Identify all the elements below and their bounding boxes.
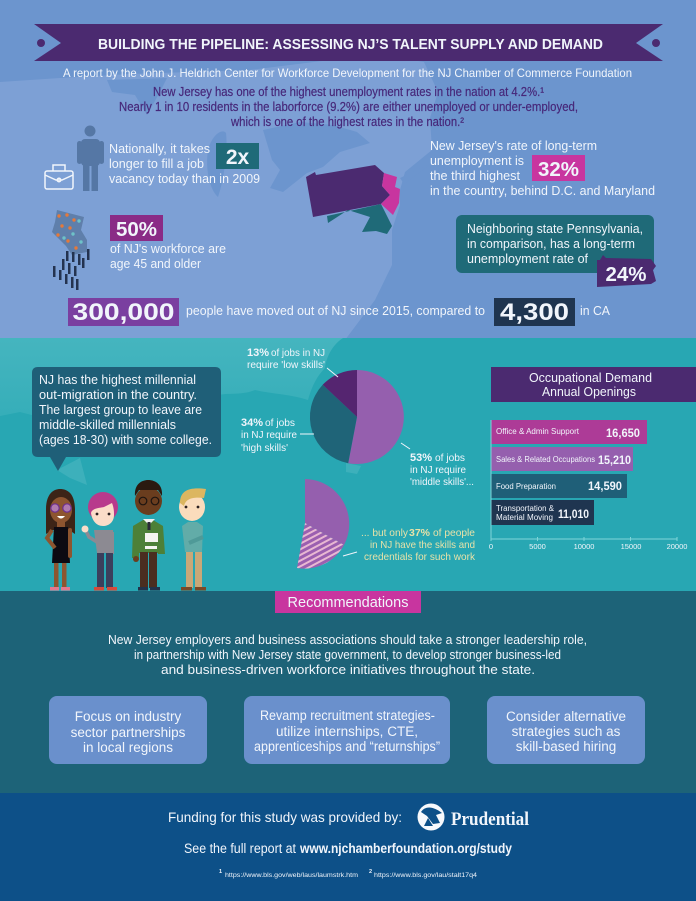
report link: See the full report at — [184, 841, 296, 856]
funding text: Funding for this study was provided by: — [168, 809, 402, 825]
24% Pennsylvania badge: 24% — [605, 263, 647, 286]
text: long-term unemployment: the third highest — [430, 168, 520, 183]
label: low skills: require 'low skills' — [247, 359, 325, 371]
bar: sales and related occupations: 15,210 — [598, 455, 631, 467]
card: alternative strategies: strategies such as — [512, 724, 621, 739]
2x badge — [216, 143, 259, 169]
text: long-term unemployment: unemployment is — [430, 153, 524, 168]
callout: millennial out-migration: out-migration in the country. — [39, 387, 197, 402]
callout: Pennsylvania comparison: unemployment rate of — [467, 251, 588, 266]
label: middle skills: 53% — [410, 452, 432, 464]
callout: millennial out-migration: NJ has the highest millennial — [39, 372, 196, 387]
bar: office and admin support: Office & Admin Support — [496, 427, 580, 436]
subtitle: A report by the John J. Heldrich Center for Workforce Development for the NJ Chamber of Commerce Foundation — [63, 66, 632, 80]
bar chart: annual openings — [489, 420, 687, 551]
pie chart: jobs by skill level — [310, 370, 404, 464]
label: only 37 percent — [343, 527, 476, 563]
man with glasses and green sweater — [132, 480, 165, 590]
stat: people moved out: people have moved out of NJ since 2015, compared to — [186, 303, 485, 318]
card: industry partnerships: Focus on industry — [75, 709, 182, 724]
footnotes: 1 — [219, 869, 222, 875]
label: low skills — [247, 347, 338, 377]
24% Pennsylvania badge — [597, 255, 656, 287]
label: only 37 percent: 37% — [409, 527, 431, 539]
icon: New Jersey crowd — [52, 210, 90, 290]
300,000 badge: 300,000 — [72, 299, 174, 326]
report link: www.njchamberfoundation.org/study — [299, 841, 512, 856]
axis labels: 10000 — [574, 542, 594, 551]
pie chart: skilled workers share — [297, 479, 349, 569]
heading: occupational demand — [491, 367, 696, 402]
panel: footer — [0, 793, 696, 901]
bar: transportation and material moving: Transportation & — [496, 504, 555, 513]
card: recruitment strategies: utilize internships, CTE, — [276, 724, 418, 739]
icon: Prudential logo — [418, 804, 444, 830]
intro text: which is one of the highest rates in the nation.² — [230, 115, 464, 129]
text: national vacancy: Nationally, it takes — [109, 141, 210, 156]
bar: office and admin support: 16,650 — [606, 428, 640, 440]
bar: office and admin support — [491, 420, 647, 444]
icon: person with briefcase — [45, 126, 104, 191]
axis labels — [489, 542, 687, 551]
heading: recommendations — [275, 591, 421, 613]
Prudential wordmark: Prudential — [451, 810, 529, 830]
heading: occupational demand: Annual Openings — [542, 385, 636, 399]
recommendation paragraph: and business-driven workforce initiatives throughout the state. — [161, 662, 535, 677]
intro text — [119, 85, 578, 129]
card: recruitment strategies: Revamp recruitment strategies- — [260, 708, 435, 723]
label: low skills: of jobs in NJ — [271, 347, 325, 359]
title: BUILDING THE PIPELINE: ASSESSING NJ’S TALENT SUPPLY AND DEMAND — [98, 36, 603, 53]
text: long-term unemployment: in the country, behind D.C. and Maryland — [430, 183, 655, 198]
bar: sales and related occupations — [491, 447, 633, 471]
heading: recommendations: Recommendations — [288, 595, 408, 611]
map: Maryland — [327, 204, 392, 234]
label: high skills: 34% — [241, 417, 263, 429]
footnotes: https://www.bls.gov/lau/stalt17q4 — [374, 873, 478, 879]
label: high skills — [241, 417, 314, 454]
intro text: Nearly 1 in 10 residents in the laborforce (9.2%) are either unemployed or under-employed, — [119, 100, 578, 114]
text: national vacancy: longer to fill a job — [109, 156, 204, 171]
label: middle skills — [401, 443, 474, 488]
panel: recommendations — [0, 591, 696, 794]
text: national vacancy — [109, 141, 260, 186]
card: alternative strategies: Consider alternative — [506, 709, 626, 724]
2x badge: 2x — [226, 146, 249, 169]
text: long-term unemployment — [430, 138, 655, 198]
label: only 37 percent: credentials for such work — [364, 551, 476, 563]
card: industry partnerships — [49, 696, 207, 764]
footnotes — [219, 869, 478, 879]
callout: Pennsylvania comparison — [456, 215, 656, 287]
label: only 37 percent: in NJ have the skills and — [370, 539, 475, 551]
axis labels: 0 — [489, 542, 493, 551]
bar: transportation and material moving: Material Moving — [496, 513, 553, 522]
label: only 37 percent: ... but only — [361, 527, 409, 539]
panel: teal section background — [0, 338, 696, 592]
card: recruitment strategies: apprenticeships and “returnships” — [254, 739, 440, 754]
label: middle skills: in NJ require — [410, 464, 466, 476]
callout: millennial out-migration — [32, 367, 221, 471]
50% badge: 50% — [116, 218, 157, 241]
woman with pink hair — [82, 492, 118, 590]
callout: millennial out-migration: middle-skilled millennials — [39, 417, 176, 432]
label: high skills: of jobs — [265, 417, 295, 429]
bar: transportation and material moving: 11,010 — [558, 509, 589, 521]
stat: people moved out: in CA — [580, 303, 610, 318]
map: New Jersey — [381, 173, 400, 215]
card: recruitment strategies — [244, 696, 450, 764]
intro text: New Jersey has one of the highest unemployment rates in the nation at 4.2%.¹ — [153, 85, 544, 99]
recommendation paragraph: in partnership with New Jersey state government, to develop stronger business-led — [134, 647, 561, 662]
32% badge — [532, 155, 585, 181]
text: long-term unemployment: New Jersey's rate of long-term — [430, 138, 597, 153]
callout: Pennsylvania comparison: in comparison, has a long-term — [467, 236, 635, 251]
axis labels: 20000 — [667, 542, 687, 551]
32% badge: 32% — [538, 158, 579, 181]
label: low skills: 13% — [247, 347, 269, 359]
callout: Pennsylvania comparison: Neighboring state Pennsylvania, — [467, 221, 643, 236]
axis labels: 5000 — [529, 542, 546, 551]
recommendation paragraph — [108, 632, 587, 677]
panel: top blue background with map — [0, 0, 696, 340]
text: 50 percent workforce: of NJ's workforce are — [110, 241, 226, 256]
label: middle skills: 'middle skills'... — [410, 476, 474, 488]
axis labels: 15000 — [621, 542, 641, 551]
report link — [184, 841, 512, 856]
bar: food preparation: 14,590 — [588, 481, 622, 493]
bar: transportation and material moving — [491, 500, 594, 525]
bar: sales and related occupations: Sales & Related Occupations — [496, 455, 595, 464]
card: industry partnerships: in local regions — [83, 740, 173, 755]
heading: occupational demand: Occupational Demand — [529, 371, 652, 385]
woman with glasses — [46, 489, 75, 590]
label: only 37 percent: of people — [433, 527, 475, 539]
callout: millennial out-migration: (ages 18-30) with some college. — [39, 432, 212, 447]
bar: food preparation — [491, 474, 627, 498]
bar: food preparation: Food Preparation — [496, 482, 556, 491]
blond man with teal shirt — [179, 488, 206, 590]
label: high skills: in NJ require — [241, 429, 297, 441]
text: 50 percent workforce — [110, 215, 226, 271]
callout: millennial out-migration: The largest group to leave are — [39, 402, 202, 417]
stat: people moved out — [68, 298, 610, 326]
footnotes: 2 — [369, 869, 372, 875]
text: 50 percent workforce: age 45 and older — [110, 256, 202, 271]
title ribbon — [34, 24, 663, 61]
map: Pennsylvania — [306, 165, 390, 217]
label: high skills: 'high skills' — [241, 442, 288, 454]
illustration: four young people — [46, 480, 206, 590]
card: alternative strategies: skill-based hiring — [516, 739, 616, 754]
label: middle skills: of jobs — [435, 452, 465, 464]
card: alternative strategies — [487, 696, 645, 764]
text: national vacancy: vacancy today than in 2009 — [109, 171, 260, 186]
card: industry partnerships: sector partnerships — [71, 725, 186, 740]
4,300 badge: 4,300 — [500, 299, 569, 326]
recommendation paragraph: New Jersey employers and business associations should take a stronger leadership role, — [108, 632, 587, 647]
footnotes: https://www.bls.gov/web/laus/laumstrk.htm — [225, 873, 358, 879]
